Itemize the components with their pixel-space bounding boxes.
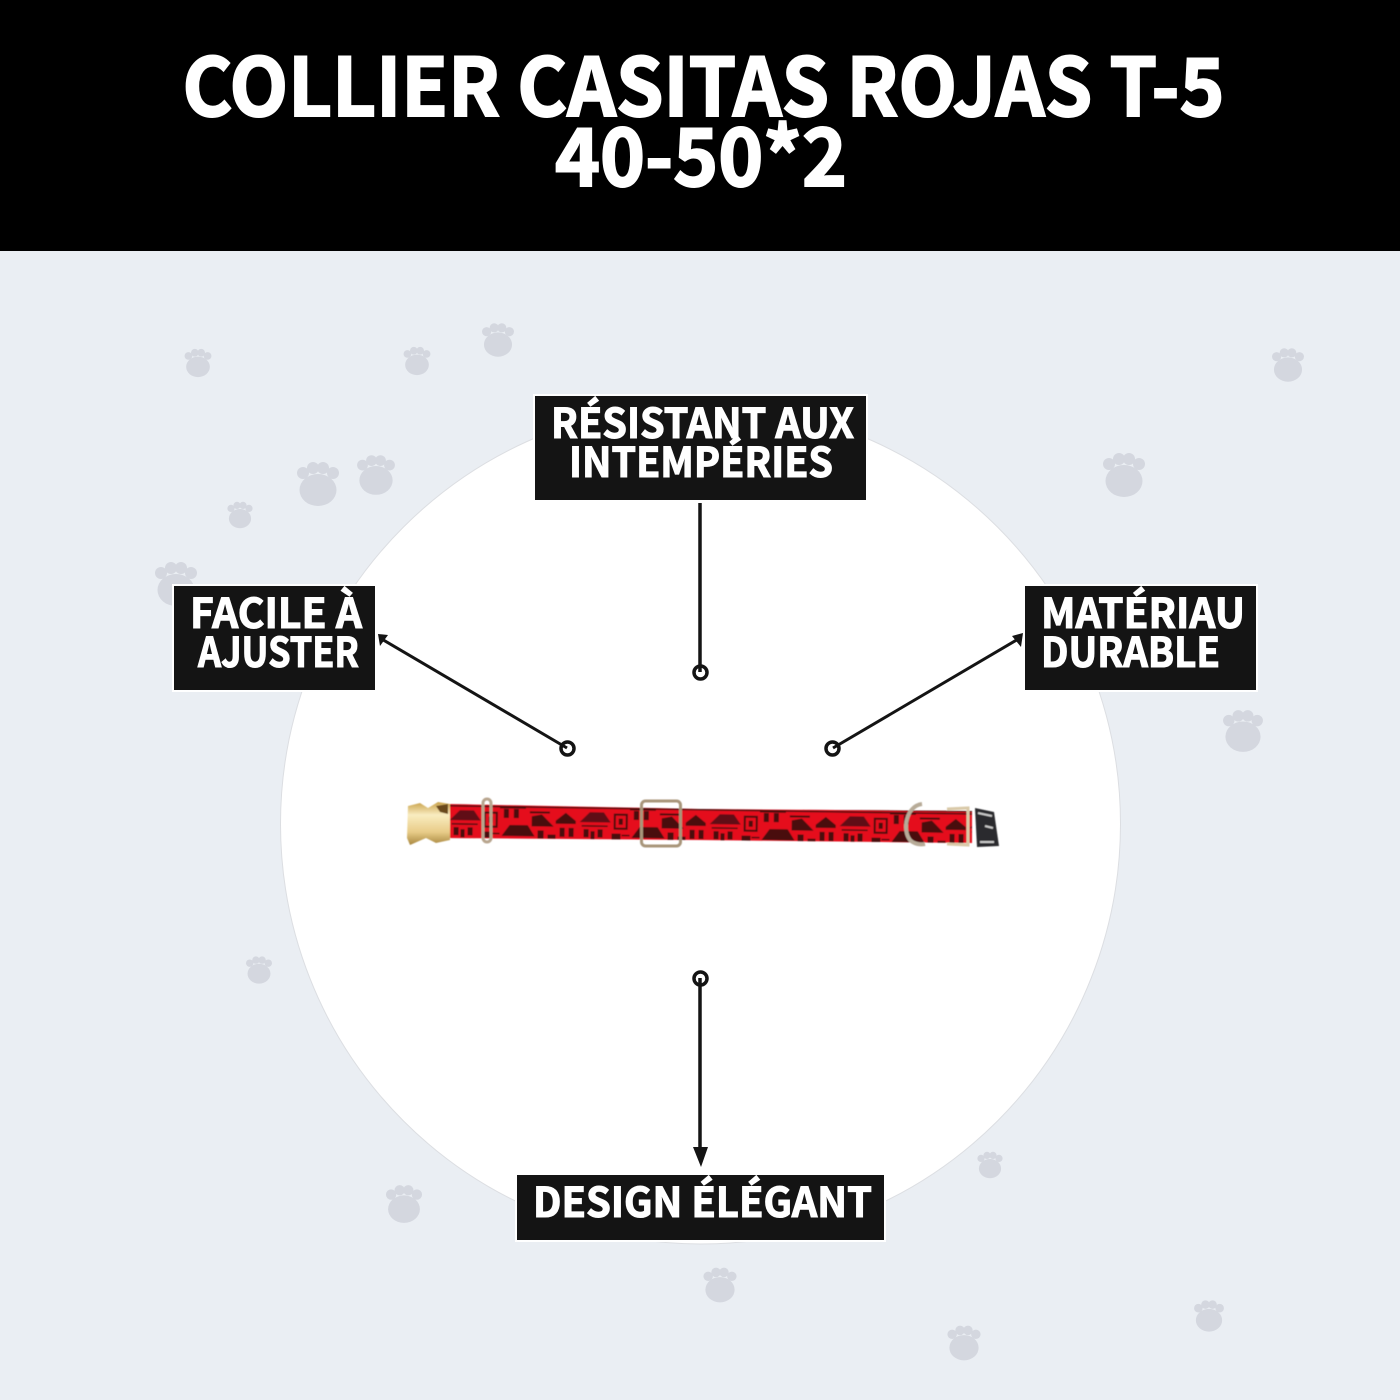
label: design élégant: DESIGN ÉLÉGANT	[533, 1169, 872, 1229]
side release buckle	[407, 802, 450, 845]
label: facile à ajuster	[173, 580, 376, 691]
label: facile à ajuster: FACILE À	[190, 580, 363, 640]
white circle	[280, 404, 1120, 1244]
header band	[0, 0, 1400, 251]
collar strap	[448, 804, 972, 843]
collar product photo	[407, 799, 999, 847]
label: résistant aux intempéries: INTEMPÉRIES	[569, 429, 833, 489]
paw prints	[155, 323, 1304, 1360]
label: résistant aux intempéries	[534, 390, 867, 501]
arrow: top label	[694, 503, 707, 679]
arrow: left label	[378, 634, 574, 755]
title: COLLIER CASITAS ROJAS T-5	[182, 24, 1224, 140]
label: matériau durable	[1024, 580, 1257, 691]
right ring	[906, 804, 925, 844]
slider	[642, 801, 680, 846]
arrow: bottom label	[693, 972, 708, 1167]
label: facile à ajuster: AJUSTER	[197, 619, 359, 679]
label: matériau durable: DURABLE	[1041, 619, 1220, 679]
left ring	[483, 799, 491, 842]
label: résistant aux intempéries: RÉSISTANT AUX	[551, 390, 854, 450]
arrow: right label	[826, 633, 1023, 755]
label: matériau durable: MATÉRIAU	[1041, 580, 1245, 640]
metal keeper	[947, 808, 968, 845]
title: 40-50*2	[555, 94, 847, 210]
title	[182, 24, 1224, 210]
metal buckle end	[975, 808, 999, 847]
